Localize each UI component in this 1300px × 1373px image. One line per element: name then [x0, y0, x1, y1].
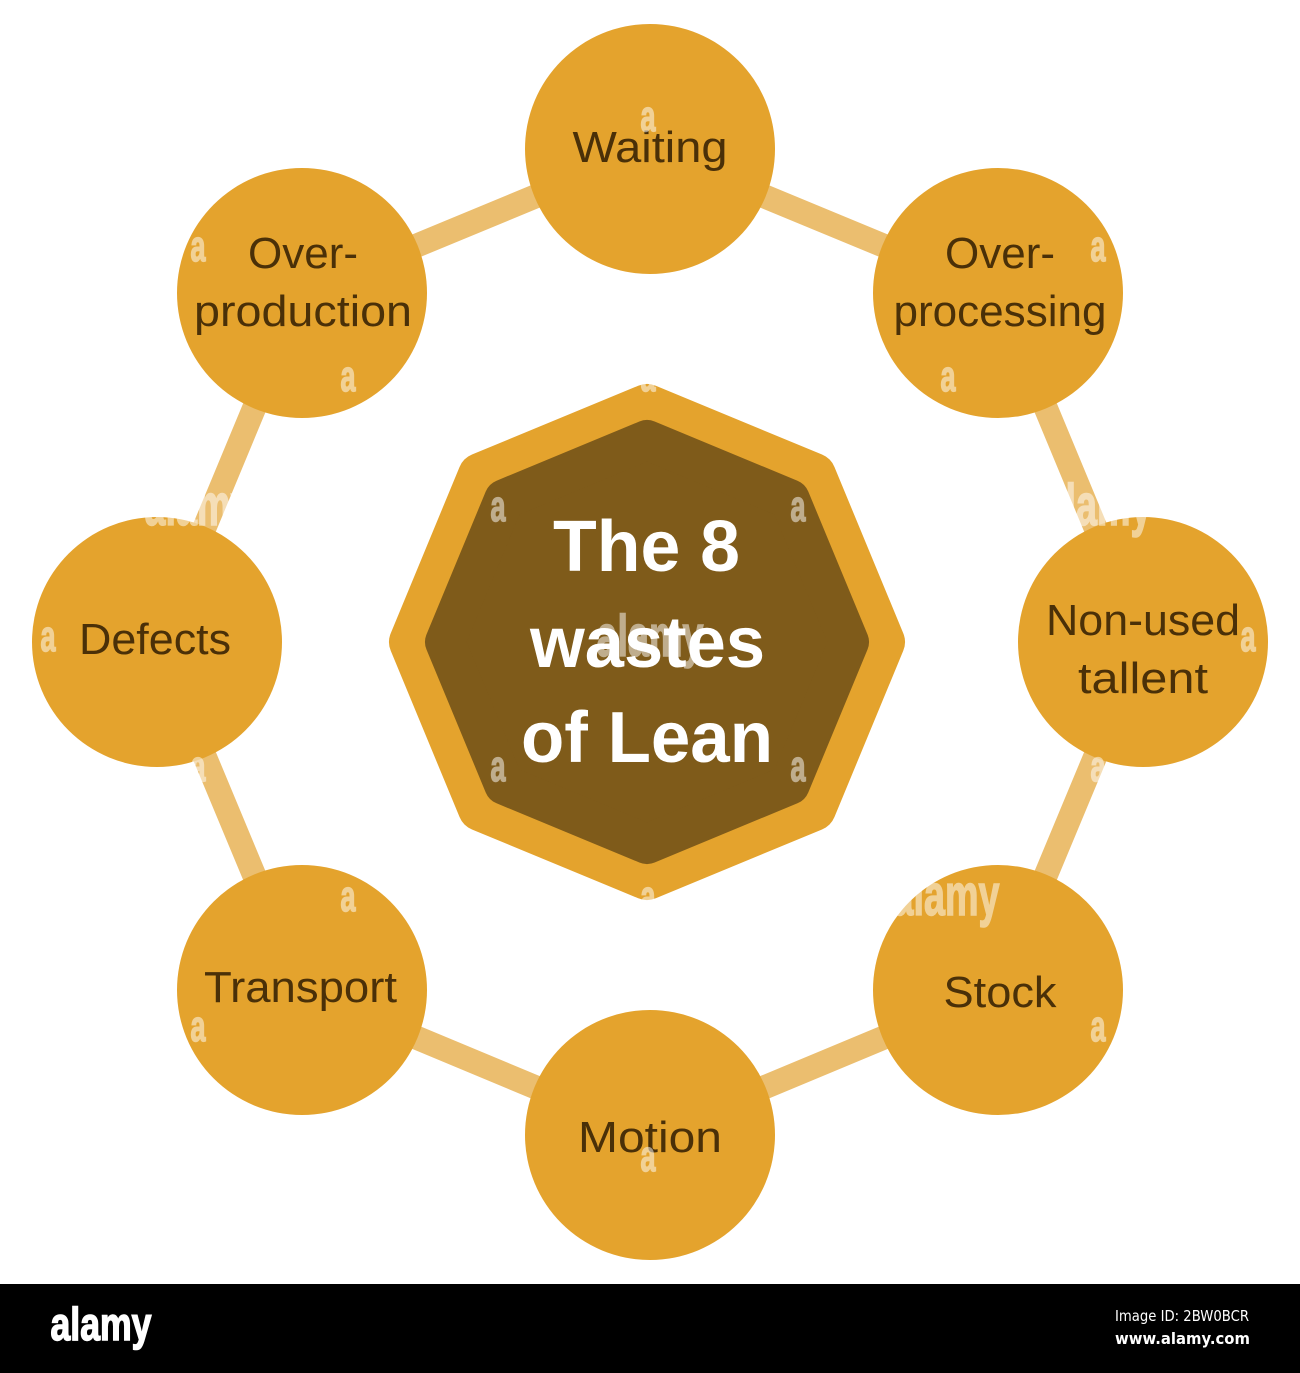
watermark marks: a	[1240, 612, 1256, 661]
watermark marks: a	[640, 1132, 656, 1181]
watermark marks: a	[340, 872, 356, 921]
circle: Over-production: Over-	[248, 229, 358, 278]
center octagon inner	[445, 440, 849, 844]
footer url: www.alamy.com	[1115, 1329, 1250, 1348]
watermark marks: a	[640, 872, 656, 921]
circle: Non-used tallent: tallent	[1078, 654, 1208, 703]
circle: Over-production: production	[194, 287, 412, 336]
watermark marks: a	[190, 1002, 206, 1051]
circle: Stock: Stock	[944, 968, 1058, 1017]
center title: of Lean	[521, 698, 773, 778]
watermark marks: a	[490, 482, 506, 531]
watermark marks: alamy	[144, 473, 252, 538]
footer logo: alamy	[50, 1298, 152, 1350]
circle: Stock	[873, 865, 1123, 1115]
watermark marks: a	[490, 742, 506, 791]
center title: The 8	[553, 507, 740, 587]
watermark marks: alamy	[1044, 473, 1152, 538]
connecting ring	[157, 149, 1143, 1135]
footer bar	[0, 1284, 1300, 1373]
watermark marks: a	[790, 742, 806, 791]
watermark marks: a	[640, 352, 656, 401]
circle: Over-production	[177, 168, 427, 418]
circle: Motion	[525, 1010, 775, 1260]
circle: Transport: Transport	[204, 963, 397, 1012]
circle: Non-used tallent	[1018, 517, 1268, 767]
watermark marks	[40, 92, 1256, 1181]
watermark marks: a	[40, 612, 56, 661]
circle: Non-used tallent: Non-used	[1046, 596, 1240, 645]
circle: Motion: Motion	[578, 1113, 722, 1162]
circle: Over-processing	[873, 168, 1123, 418]
circle: Defects: Defects	[79, 615, 231, 664]
footer image id: Image ID: 2BW0BCR	[1115, 1307, 1249, 1325]
center title: wastes	[529, 603, 765, 683]
watermark marks: alamy	[892, 863, 1000, 928]
watermark marks: a	[340, 352, 356, 401]
circle: Over-processing: processing	[894, 287, 1106, 336]
circle: Waiting	[525, 24, 775, 274]
watermark marks: a	[1090, 222, 1106, 271]
circle: Over-processing: Over-	[945, 229, 1055, 278]
center octagon outer	[412, 407, 882, 877]
watermark marks: a	[940, 352, 956, 401]
center title	[521, 507, 773, 778]
watermark marks: a	[190, 742, 206, 791]
circle: Waiting: Waiting	[572, 123, 728, 172]
watermark marks: a	[1090, 1002, 1106, 1051]
watermark marks: alamy	[596, 604, 704, 669]
watermark marks: a	[790, 482, 806, 531]
circle: Transport	[177, 865, 427, 1115]
watermark marks: a	[640, 92, 656, 141]
watermark marks: a	[190, 222, 206, 271]
watermark marks: a	[1090, 742, 1106, 791]
circle: Defects	[32, 517, 282, 767]
